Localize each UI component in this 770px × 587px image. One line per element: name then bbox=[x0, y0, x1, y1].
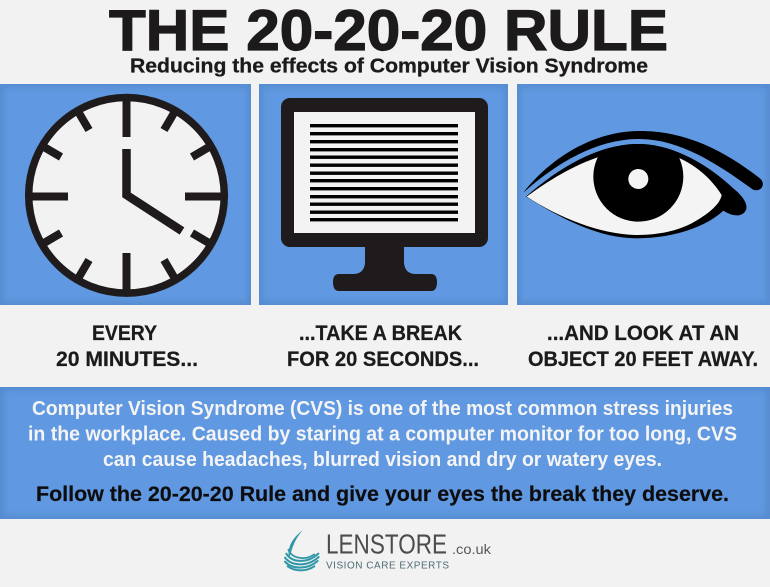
panel: CVS explanation bbox=[0, 387, 770, 519]
caption: every 20 minutes: EVERY bbox=[92, 322, 157, 345]
caption: take a break: ...TAKE A BREAK bbox=[299, 322, 462, 345]
icon: clock bbox=[29, 98, 224, 293]
panel: clock bbox=[0, 84, 251, 305]
caption: take a break bbox=[287, 322, 479, 371]
caption: look at an object bbox=[528, 322, 758, 371]
panel: monitor bbox=[259, 84, 508, 305]
subtitle: Reducing the effects of Computer Vision Syndrome bbox=[130, 56, 648, 78]
title: THE 20-20-20 RULE bbox=[109, 0, 668, 63]
logo domain: .co.uk bbox=[452, 542, 491, 557]
caption: every 20 minutes bbox=[56, 322, 198, 371]
text: call to action: Follow the 20-20-20 Rule and give your eyes the break they deserve. bbox=[36, 482, 729, 506]
caption: take a break: FOR 20 SECONDS... bbox=[287, 348, 479, 371]
logo wordmark: LENSTORE bbox=[326, 528, 447, 560]
text: CVS description: Computer Vision Syndrome (CVS) is one of the most common stress injuries bbox=[32, 398, 733, 420]
icon: eye bbox=[523, 131, 763, 238]
icon: lens swirl bbox=[285, 530, 319, 570]
caption: look at an object: OBJECT 20 FEET AWAY. bbox=[528, 348, 758, 371]
logo: Lenstore bbox=[285, 528, 491, 572]
text: CVS description bbox=[28, 398, 737, 471]
icon: monitor bbox=[281, 98, 488, 291]
panel: eye bbox=[517, 84, 770, 305]
text: CVS description: can cause headaches, blurred vision and dry or watery eyes. bbox=[103, 449, 662, 471]
logo tagline: VISION CARE EXPERTS bbox=[326, 560, 449, 572]
text: CVS description: in the workplace. Caused by staring at a computer monitor for too long, CVS bbox=[28, 424, 737, 446]
caption: look at an object: ...AND LOOK AT AN bbox=[547, 322, 739, 345]
caption: every 20 minutes: 20 MINUTES... bbox=[56, 348, 198, 371]
